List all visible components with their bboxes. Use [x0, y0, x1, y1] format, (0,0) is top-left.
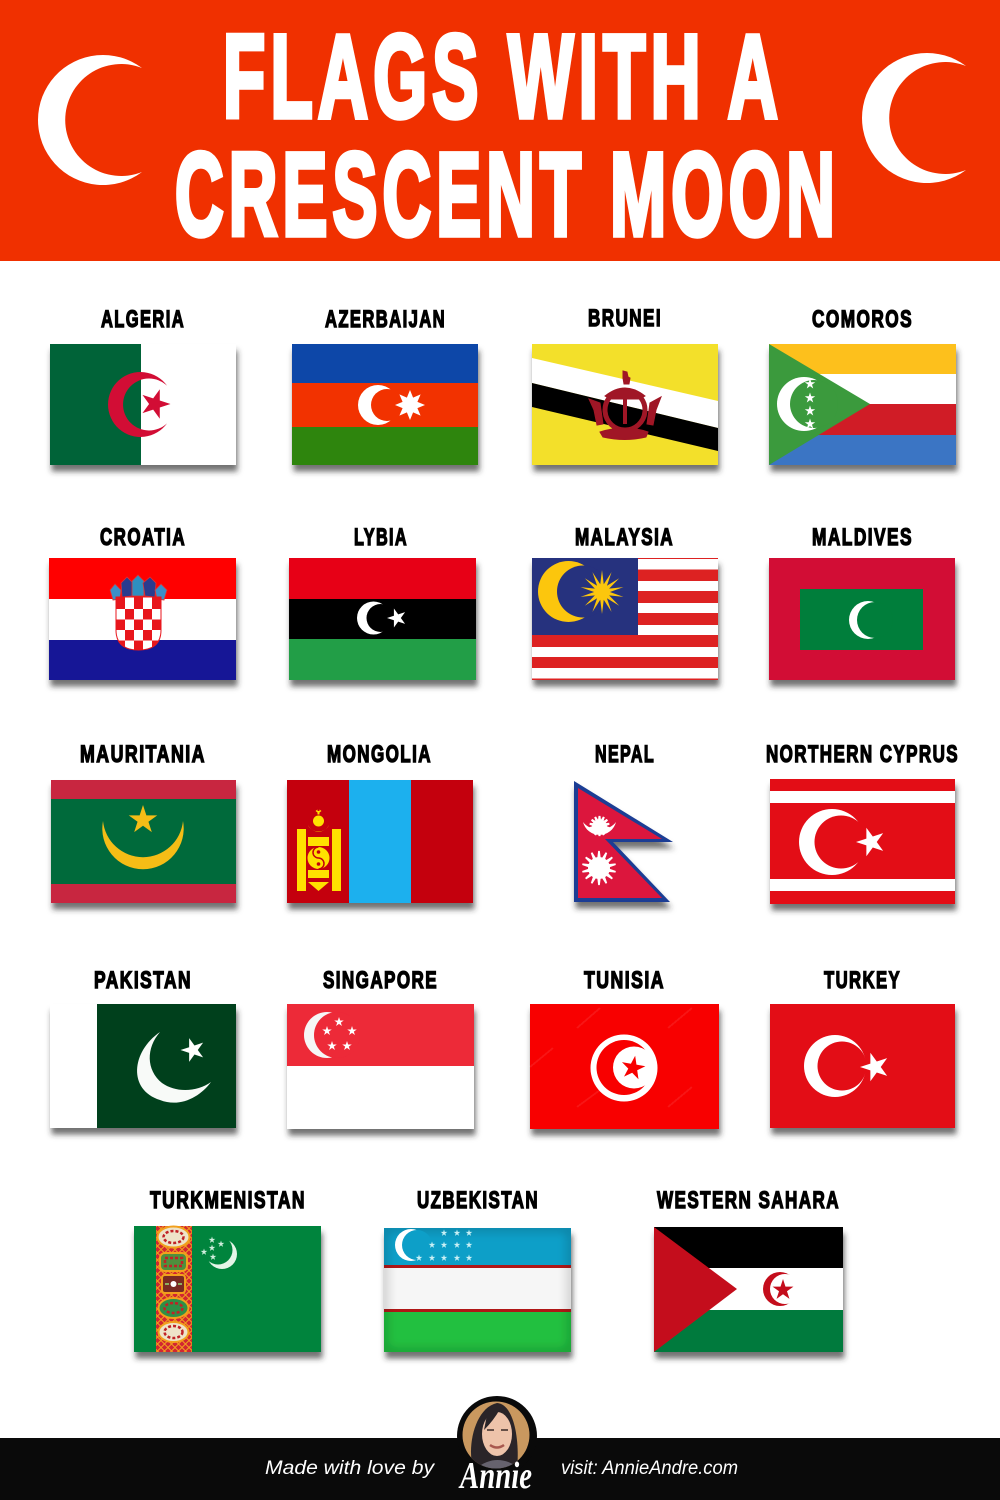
panel: Croatia: CROATIA	[100, 524, 186, 551]
flag: Mauritania	[51, 780, 236, 903]
panel: Tunisia	[530, 967, 719, 1129]
flag: Tunisia	[530, 1004, 719, 1129]
soyombo symbol	[297, 810, 341, 891]
title	[175, 11, 840, 261]
flag: Northern Cyprus	[770, 779, 955, 904]
emblem	[589, 371, 661, 440]
panel: Singapore: SINGAPORE	[323, 967, 438, 994]
panel: Mauritania: MAURITANIA	[80, 741, 206, 768]
flag: Libya	[289, 558, 476, 680]
panel: Northern Cyprus	[766, 741, 959, 904]
panel: Brunei: BRUNEI	[588, 305, 662, 332]
panel: Malaysia: MALAYSIA	[575, 524, 674, 551]
flag: Azerbaijan	[292, 344, 478, 465]
flag: Malaysia	[532, 558, 718, 680]
panel: Pakistan	[50, 967, 236, 1128]
panel: Algeria: ALGERIA	[101, 306, 185, 333]
panel: Croatia	[49, 524, 236, 680]
header banner	[0, 0, 1000, 261]
panel: Western Sahara	[654, 1187, 843, 1352]
flag: Comoros	[769, 344, 956, 465]
flag: Pakistan	[50, 1004, 236, 1128]
panel: Brunei	[532, 305, 718, 465]
panel: Maldives	[769, 524, 955, 680]
flag: Turkmenistan	[134, 1226, 321, 1352]
panel: Turkey	[770, 967, 955, 1128]
panel: Libya	[289, 524, 476, 680]
flag: Algeria	[50, 344, 236, 465]
panel: Uzbekistan: UZBEKISTAN	[417, 1187, 539, 1214]
flag: Maldives	[769, 558, 955, 680]
coat of arms shield	[116, 597, 161, 650]
icon: left crescent	[38, 55, 142, 185]
panel: Turkmenistan	[134, 1187, 321, 1352]
panel: Tunisia: TUNISIA	[584, 967, 665, 994]
text: website: visit: AnnieAndre.com	[561, 1458, 738, 1479]
signature: Annie: Annie	[458, 1455, 532, 1497]
panel: Comoros	[769, 306, 956, 465]
coat of arms crown	[110, 575, 167, 600]
flag: Western Sahara	[654, 1227, 843, 1352]
panel: Azerbaijan	[292, 306, 478, 465]
panel: Nepal: NEPAL	[595, 741, 655, 768]
panel: Pakistan: PAKISTAN	[94, 967, 192, 994]
panel: Turkmenistan: TURKMENISTAN	[150, 1187, 306, 1214]
panel: Maldives: MALDIVES	[812, 524, 913, 551]
flag: Mongolia	[287, 780, 473, 903]
text: made with love by: Made with love by	[265, 1458, 436, 1479]
panel: Mongolia: MONGOLIA	[327, 741, 432, 768]
panel: Nepal	[574, 741, 673, 902]
portrait	[457, 1396, 537, 1476]
panel: Comoros: COMOROS	[812, 306, 913, 333]
panel: Uzbekistan	[384, 1187, 571, 1352]
carpet motifs	[158, 1226, 190, 1342]
icon: right crescent	[862, 53, 966, 183]
panel: Singapore	[287, 967, 474, 1129]
footer bar	[0, 1396, 1000, 1500]
flag: Nepal	[574, 781, 673, 902]
panel: Algeria	[50, 306, 236, 465]
flag: Turkey	[770, 1004, 955, 1128]
flag: Brunei	[532, 344, 718, 465]
flag: Singapore	[287, 1004, 474, 1129]
panel: Libya: LYBIA	[354, 524, 408, 551]
panel: Mongolia	[287, 741, 473, 903]
panel: Azerbaijan: AZERBAIJAN	[325, 306, 446, 333]
panel: Malaysia	[532, 524, 718, 680]
flag: Croatia	[49, 558, 236, 680]
panel: Mauritania	[51, 741, 236, 903]
panel: Western Sahara: WESTERN SAHARA	[657, 1187, 840, 1214]
flag: Uzbekistan	[384, 1228, 571, 1352]
panel: Turkey: TURKEY	[824, 967, 901, 994]
